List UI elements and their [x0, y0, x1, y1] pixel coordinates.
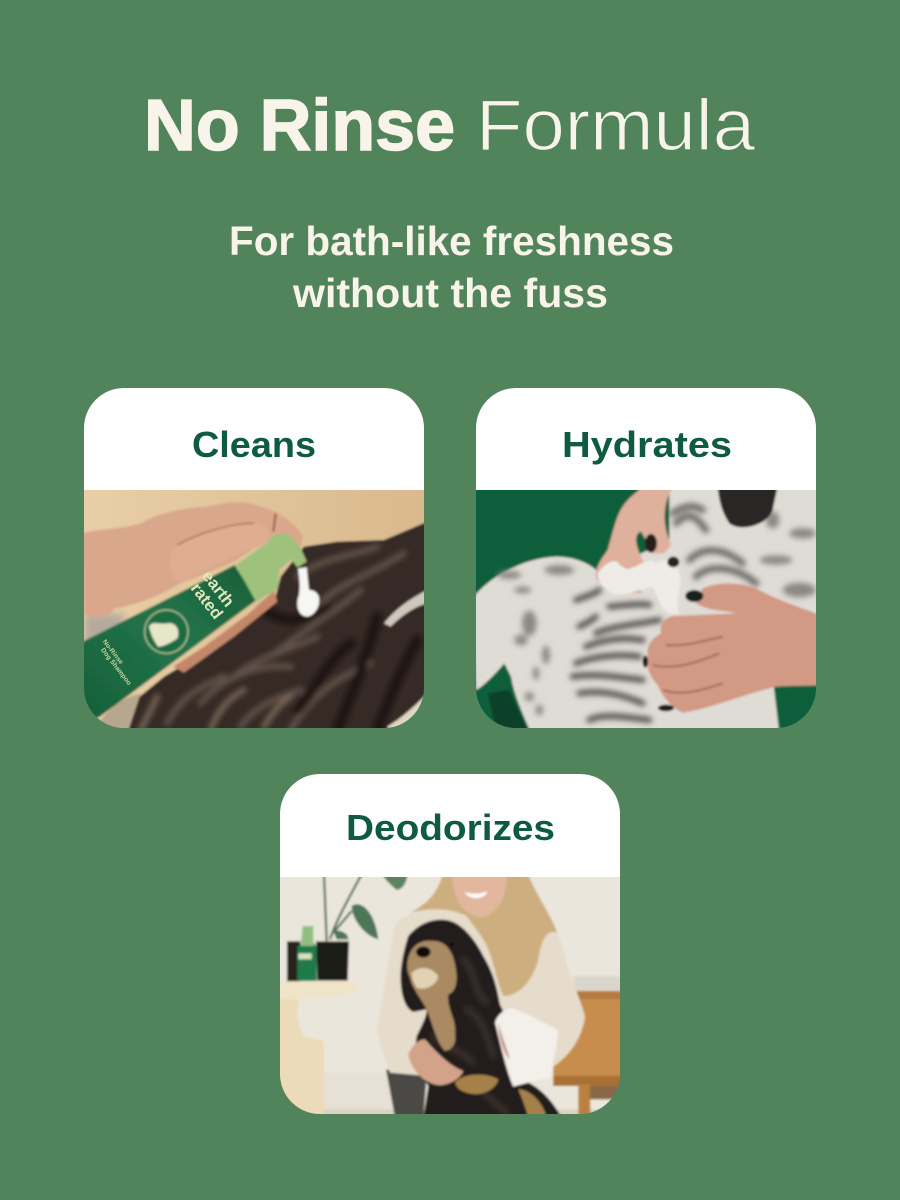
bottle logo — [145, 610, 188, 653]
card header: cleans — [84, 388, 424, 491]
subtitle: For bath-like freshness — [229, 218, 674, 264]
foam — [598, 560, 680, 614]
title: Formula — [476, 86, 756, 166]
bottle text — [101, 572, 232, 685]
bottle — [81, 565, 257, 723]
face — [452, 874, 507, 917]
panel: cleans — [81, 388, 427, 733]
dog paw — [455, 1075, 498, 1094]
heading: cleans: Cleans — [192, 424, 316, 465]
photo: lathering spotted dog — [473, 487, 819, 733]
photo: foam bottle on dog — [81, 487, 427, 733]
nails — [685, 590, 703, 602]
bottle text: Dog Shampoo — [99, 647, 132, 687]
dark floor gap — [488, 690, 528, 730]
bottle collar — [236, 532, 307, 602]
dog fur — [128, 522, 424, 728]
bottle text: rated — [187, 579, 227, 623]
table — [278, 981, 358, 999]
dresser — [573, 976, 623, 992]
pots — [287, 941, 300, 981]
subtitle: without the fuss — [292, 270, 608, 316]
dog — [401, 920, 562, 1118]
lower hand — [647, 583, 819, 713]
hand — [408, 1039, 463, 1085]
small bottle — [296, 942, 319, 982]
dog body — [473, 487, 819, 733]
card header: deodorizes — [280, 774, 620, 878]
panel: deodorizes — [277, 774, 623, 1119]
pants — [386, 1069, 427, 1118]
upper hand — [596, 487, 673, 593]
fur markings — [497, 511, 816, 715]
title — [144, 86, 756, 166]
foam — [297, 567, 319, 616]
dog muzzle — [407, 941, 457, 1051]
subtitle — [229, 218, 674, 316]
card header: hydrates — [476, 388, 816, 491]
plant — [324, 874, 362, 941]
towel — [495, 1008, 558, 1087]
panel: hydrates — [473, 388, 819, 733]
sweater — [377, 909, 585, 1078]
hand — [82, 502, 303, 617]
fingers behind bottle — [173, 591, 277, 673]
heading: hydrates: Hydrates — [562, 424, 732, 465]
photo: woman towelling dog — [277, 873, 623, 1119]
dark ear — [718, 487, 778, 527]
hair — [410, 874, 557, 996]
title: No Rinse — [144, 86, 455, 166]
bottle text: No-Rinse — [101, 639, 124, 666]
heading: deodorizes: Deodorizes — [346, 807, 555, 848]
bottle text: earth — [198, 567, 238, 611]
